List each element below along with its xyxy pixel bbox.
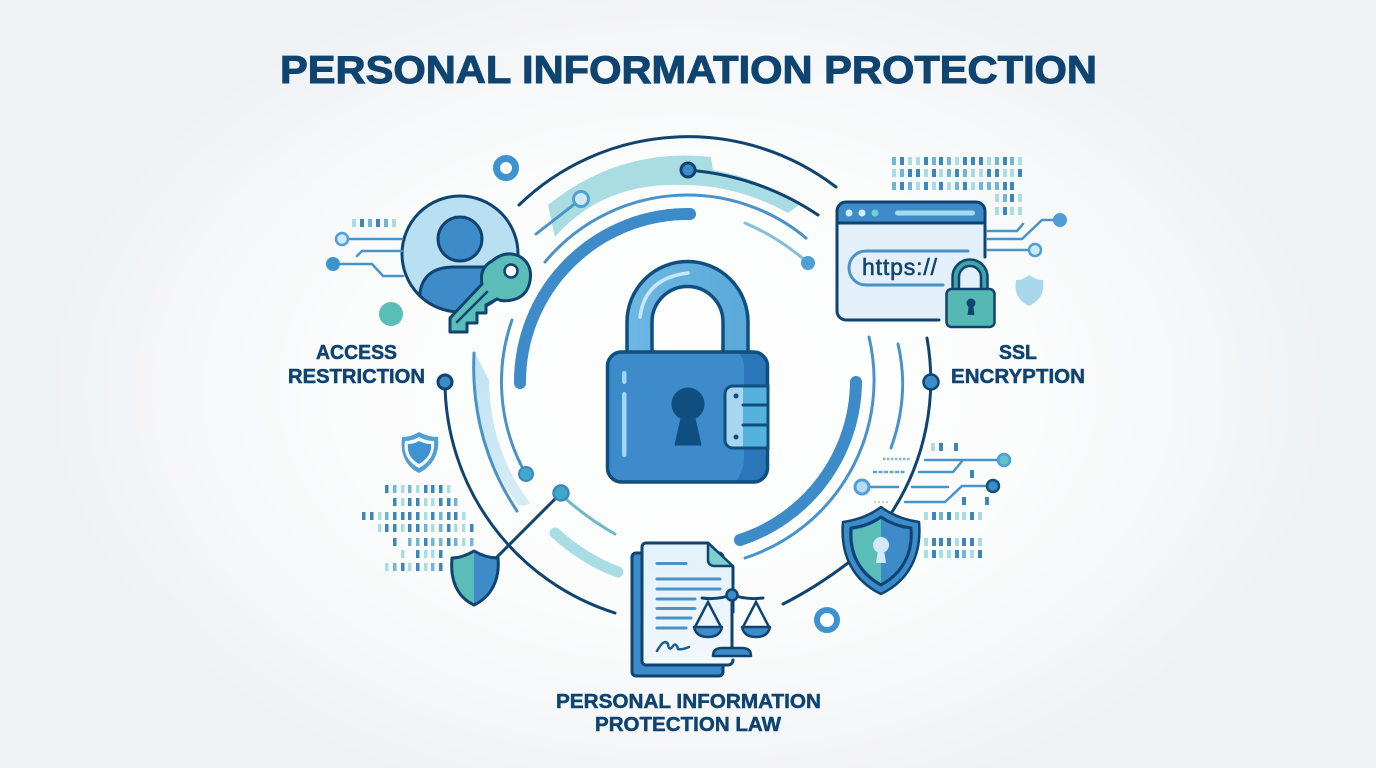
title: PERSONAL INFORMATION PROTECTION	[280, 49, 1097, 92]
label: personal information protection law: PERSONAL INFORMATION	[556, 691, 821, 713]
binary bars lower left	[362, 485, 474, 571]
icon: small blue shield left	[402, 432, 438, 473]
label: access restriction	[288, 342, 425, 388]
label: personal information protection law: PROTECTION LAW	[595, 714, 781, 736]
outer navy ring arcs	[445, 137, 931, 613]
binary bars lower right	[924, 443, 989, 558]
label: access restriction: RESTRICTION	[288, 366, 425, 388]
left arc nodes	[438, 374, 938, 572]
icon: split shield lower left	[452, 551, 498, 605]
icon: keyhole shield right	[843, 507, 919, 594]
central padlock	[608, 261, 768, 482]
label: ssl encryption	[951, 342, 1085, 388]
top teal band	[548, 156, 799, 237]
left sliver	[474, 353, 530, 511]
thin blue arcs	[501, 195, 903, 558]
label: ssl encryption: SSL	[999, 342, 1037, 364]
icon: ring bottom	[817, 610, 837, 630]
icon: pale shield	[1016, 275, 1043, 306]
teal dot	[379, 302, 403, 326]
icon: document with scales	[632, 543, 770, 676]
label: personal information protection law	[556, 691, 821, 736]
right top circuit lines	[987, 213, 1067, 256]
icon: ring top left	[496, 158, 516, 178]
left circuit lines	[326, 219, 403, 276]
icon: user with key	[402, 196, 531, 332]
binary bars top right	[892, 157, 1022, 215]
inner thick arcs	[520, 214, 856, 540]
icon: browser https window	[837, 202, 985, 320]
right lower circuits	[855, 454, 1010, 502]
label: access restriction: ACCESS	[316, 342, 397, 364]
icon: small teal lock	[946, 260, 994, 327]
label: ssl encryption: ENCRYPTION	[951, 366, 1085, 388]
top arc nodes	[536, 163, 818, 270]
icon: browser https window: https://	[862, 254, 938, 280]
